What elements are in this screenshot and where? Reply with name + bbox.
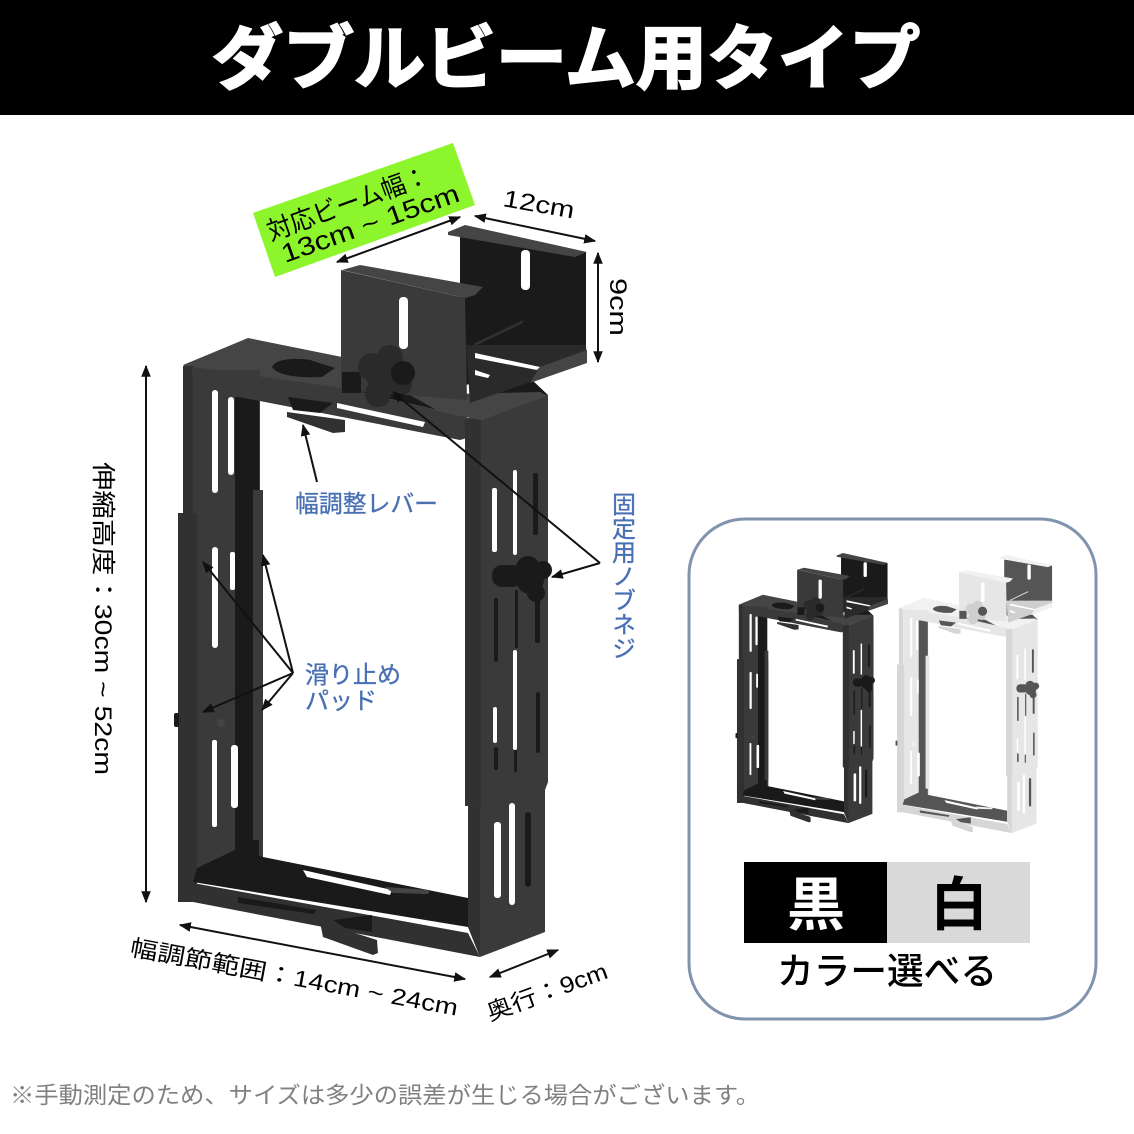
product illustration: black bracket, large [174, 225, 587, 957]
product: white bracket small [896, 555, 1052, 833]
callout: width adjustment lever: 幅調整レバー [295, 491, 438, 518]
dimension label: depth: 奥行：9cm [483, 958, 611, 1026]
swatch: white: 白 [930, 873, 988, 938]
dimension arrow: clamp depth [475, 216, 595, 241]
swatch: black [744, 862, 887, 943]
callout: width adjustment lever [295, 425, 438, 518]
dimension arrow: depth [490, 950, 558, 977]
product: black bracket small [736, 553, 888, 823]
dimension arrow: beam width [337, 217, 460, 262]
dimension arrow: extended height [145, 366, 147, 902]
swatch: black: 黒 [787, 873, 845, 938]
footnote: ※手動測定のため、サイズは多少の誤差が生じる場合がございます。 [10, 1082, 760, 1108]
callout: fixing knob screw: 固定用ノブネジ [608, 492, 636, 660]
tag text: line 1: 対応ビーム幅： [263, 160, 433, 247]
dimension label: 12cm: 12cm [501, 185, 577, 224]
callout: non-slip pads: パッド [305, 688, 377, 715]
dimension arrow: width range [180, 925, 465, 979]
title: ダブルビーム用タイプ [212, 20, 920, 98]
title bar [0, 0, 1134, 115]
dimension label: width range: 幅調節範囲：14cm ~ 24cm [128, 934, 460, 1021]
callout: non-slip pads: 滑り止め [305, 662, 401, 689]
dimension arrow: clamp height [597, 253, 599, 362]
callout: non-slip pads [203, 555, 401, 715]
panel caption: カラー選べる [777, 951, 997, 992]
panel: colour options [689, 519, 1096, 1019]
beam width tag [253, 143, 475, 277]
swatch: white [887, 862, 1030, 943]
dimension label: 9cm: 9cm [604, 278, 631, 336]
tag text: line 2: 13cm ~ 15cm [277, 178, 463, 269]
dimension label: extended height: 伸縮高度：30cm ~ 52cm [89, 462, 116, 775]
callout: fixing knob screw [393, 392, 636, 660]
